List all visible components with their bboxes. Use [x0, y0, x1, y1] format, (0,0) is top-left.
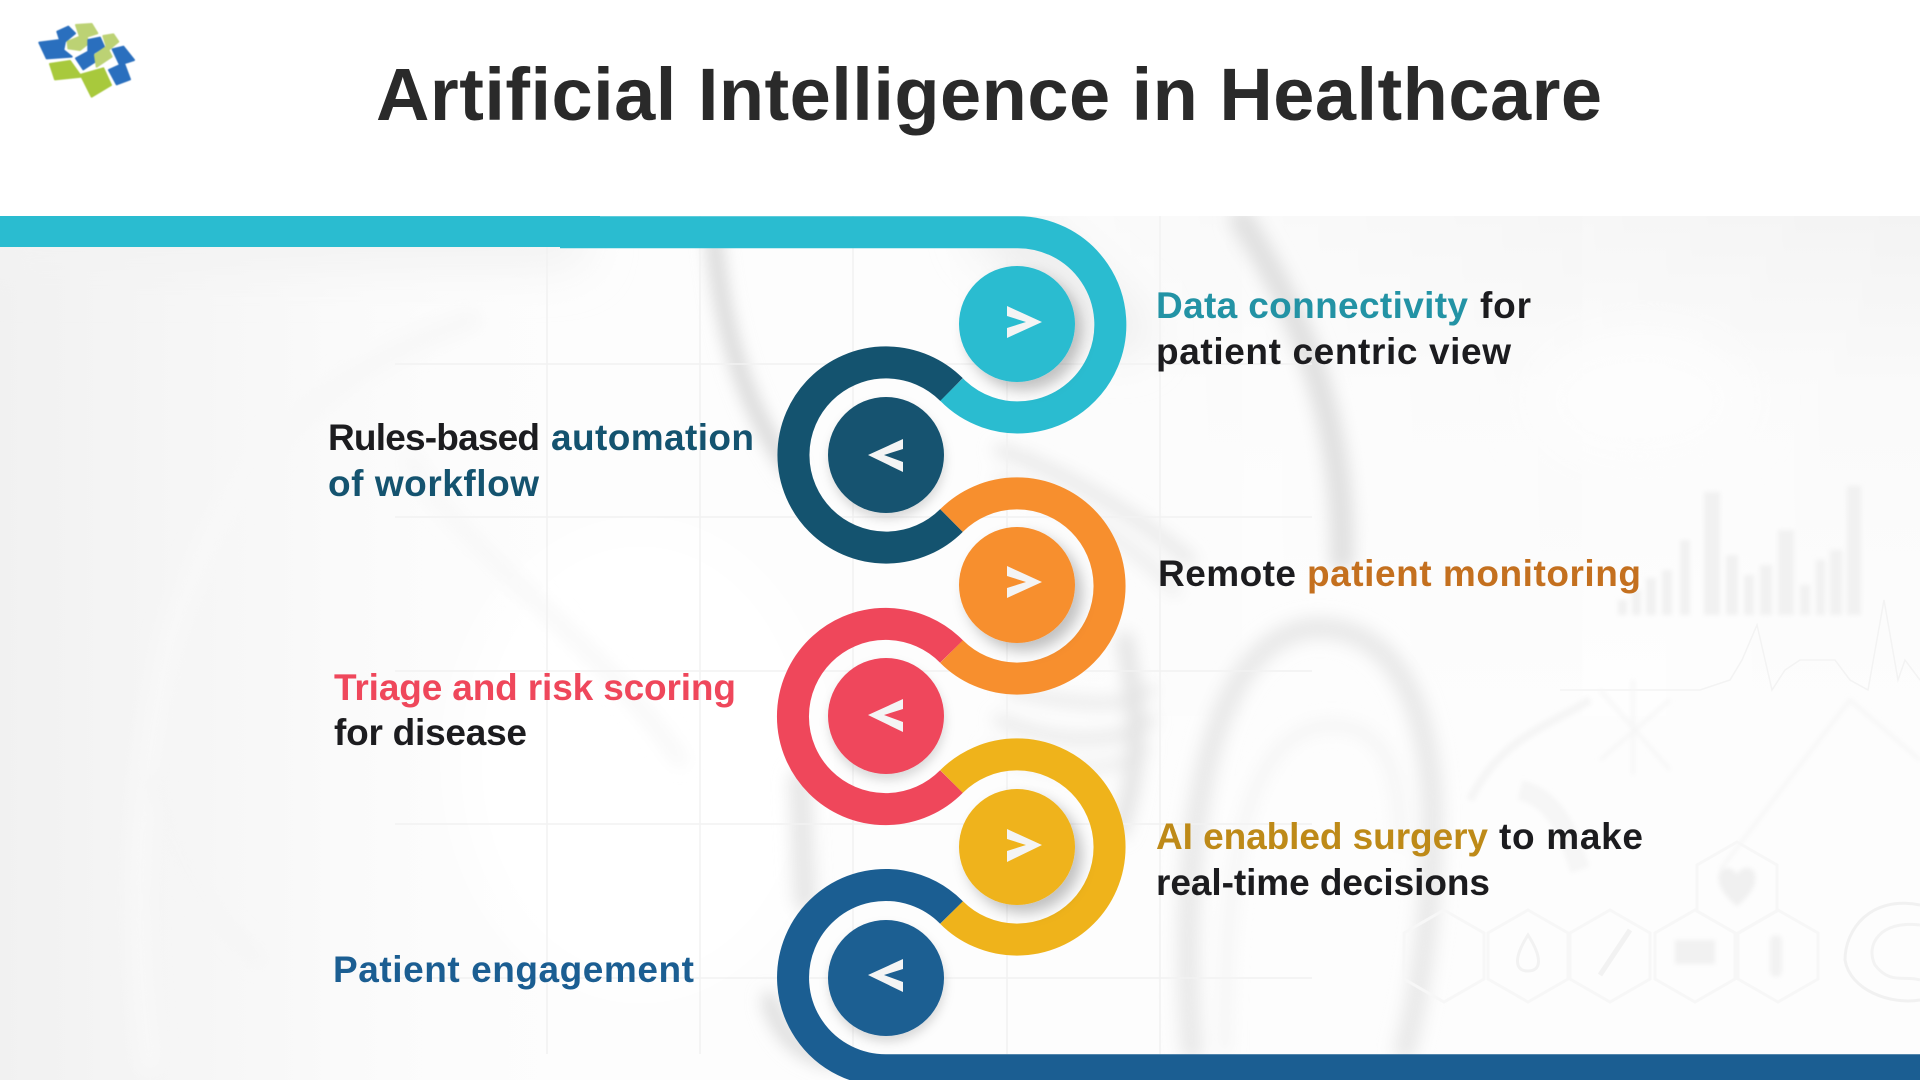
label: patient engagement: Patient engagement [333, 949, 694, 990]
label: data connectivity: Data connectivity [1156, 285, 1468, 326]
label: rules-based automation: automation [551, 417, 754, 458]
label: triage and risk scoring [334, 667, 736, 753]
step 1 circle: teal with right arrow [959, 266, 1075, 382]
ribbon: five-step S-curve [560, 232, 1920, 1070]
label: remote patient monitoring [1158, 553, 1641, 594]
label: rules-based automation: Rules-based [328, 417, 540, 458]
label: triage and risk scoring: for disease [334, 712, 527, 753]
label: AI enabled surgery [1156, 816, 1643, 903]
ribbon segment: dark teal [793, 362, 952, 548]
background: faint bar chart [1618, 486, 1861, 615]
label: rules-based automation: of workflow [328, 463, 539, 504]
background: blurred doctor photo [0, 216, 1920, 1080]
step 3 circle: orange with right arrow [959, 527, 1075, 643]
ribbon segment: orange [952, 493, 1110, 679]
label: data connectivity [1156, 285, 1531, 372]
step 6 circle: blue with left arrow [828, 920, 944, 1036]
background: faint molecule and network [1470, 680, 1920, 870]
ribbon segment: pink [793, 624, 952, 809]
step 2 circle: dark teal with left arrow [828, 397, 944, 513]
logo [39, 24, 134, 97]
label: rules-based automation [328, 417, 754, 504]
background: faint medical hexagons and brain [1404, 842, 1920, 1002]
background: faint heartbeat line [1560, 600, 1920, 690]
ribbon segment: blue [793, 885, 1920, 1070]
step 5 circle: yellow with right arrow [959, 789, 1075, 905]
ribbon segment: yellow [952, 754, 1110, 940]
label: remote patient monitoring: Remote [1158, 553, 1296, 594]
ribbon segment: teal [560, 232, 1110, 417]
label: AI enabled surgery: AI enabled surgery [1156, 816, 1488, 857]
label: remote patient monitoring: patient monitoring [1307, 553, 1641, 594]
top teal band [0, 216, 600, 247]
label: AI enabled surgery: real-time decisions [1156, 862, 1490, 903]
label: data connectivity: for [1480, 285, 1531, 326]
title: Artificial Intelligence in Healthcare [376, 53, 1602, 136]
label: triage and risk scoring: Triage and risk scoring [334, 667, 736, 708]
label: data connectivity: patient centric view [1156, 331, 1511, 372]
label: AI enabled surgery: to make [1499, 816, 1643, 857]
step 4 circle: pink with left arrow [828, 658, 944, 774]
